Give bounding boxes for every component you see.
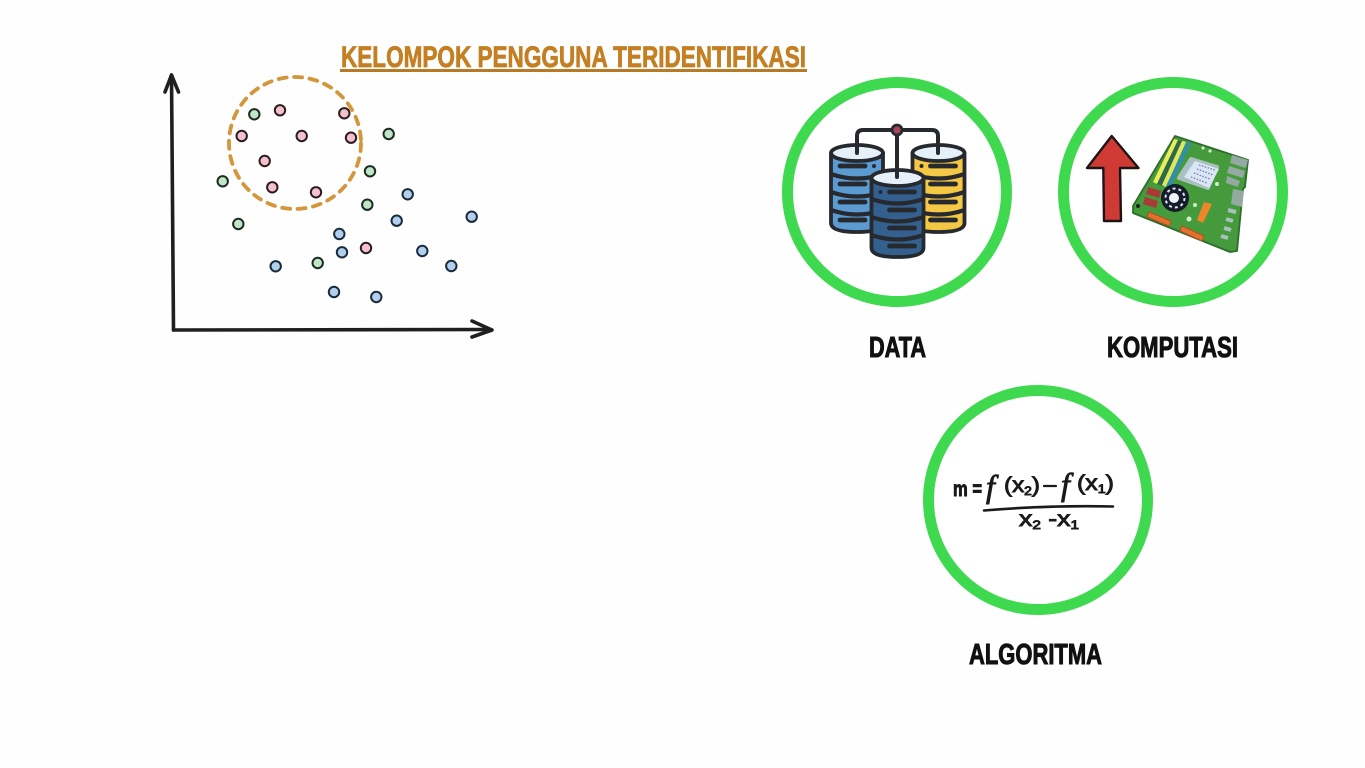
- formula: f: [1061, 466, 1074, 502]
- panel: algoritma: [928, 390, 1148, 671]
- formula: (x: [1077, 472, 1094, 495]
- formula: 1: [1070, 518, 1079, 532]
- formula: x: [1019, 508, 1030, 531]
- icon: motherboard: [1133, 136, 1248, 252]
- formula: ): [1106, 472, 1114, 495]
- formula: 2: [1032, 518, 1041, 532]
- formula: 1: [1098, 482, 1106, 496]
- formula: 2: [1024, 484, 1032, 498]
- connector lines: [857, 130, 938, 153]
- green ring: [788, 82, 1006, 302]
- chart axes: [165, 75, 492, 337]
- icon: databases: [831, 125, 964, 257]
- green data points: [218, 109, 394, 268]
- formula: -x: [1041, 508, 1071, 531]
- formula: f: [986, 468, 999, 504]
- icon: red up arrow: [1087, 136, 1138, 221]
- middle cylinder: [872, 170, 924, 257]
- right cylinder: [912, 145, 964, 232]
- formula: [953, 466, 1114, 532]
- green ring: [928, 390, 1148, 610]
- label: ALGORITMA: [969, 639, 1102, 671]
- label: KOMPUTASI: [1107, 332, 1238, 364]
- dashed highlight circle: [229, 77, 361, 209]
- label: DATA: [869, 332, 926, 364]
- panel: komputasi: [1064, 82, 1282, 364]
- formula: ): [1032, 474, 1040, 497]
- center connector node: [895, 130, 899, 177]
- formula: m =: [953, 478, 982, 501]
- title: KELOMPOK PENGGUNA TERIDENTIFIKASI: [341, 41, 806, 74]
- scatter chart: [165, 75, 492, 337]
- blue data points: [270, 189, 477, 302]
- panel: data: [788, 82, 1006, 364]
- left cylinder: [831, 145, 883, 232]
- green ring: [1064, 82, 1282, 302]
- formula: (x: [1004, 474, 1022, 497]
- pink data points: [236, 105, 371, 253]
